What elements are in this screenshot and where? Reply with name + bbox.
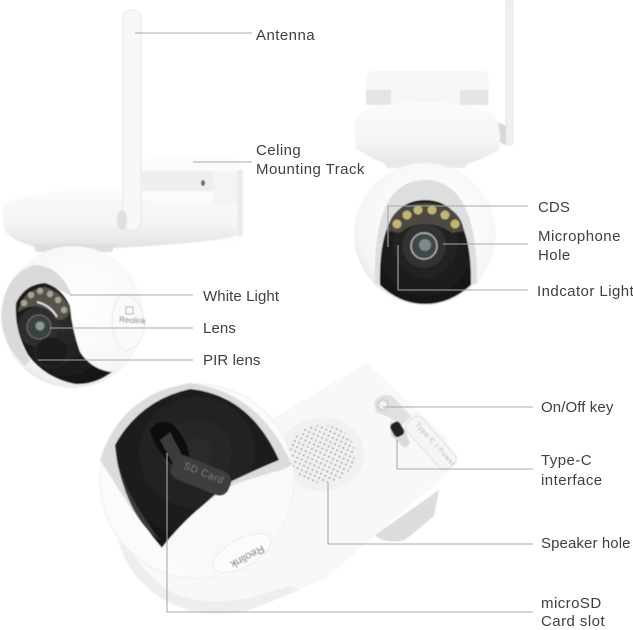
ball [354,163,496,305]
Reolink upside-down badge [207,526,277,580]
type-c cover tab: Type-C / Power [414,422,457,468]
base plate [117,363,455,614]
SD slot [150,422,190,465]
label: Celing Mounting Track: Mounting Track [256,161,365,178]
type-c cover tab [403,413,459,473]
dome base [3,190,237,248]
type-c port [389,420,406,439]
bracket underside [375,490,439,542]
white lower shell [160,467,293,576]
label: Microphone Hole: Hole [538,247,571,264]
label: Antenna: Antenna [256,27,315,44]
gray ring [1,265,72,366]
label: Celing Mounting Track: Celing [256,142,301,159]
speaker [280,417,364,491]
label: microSD Card slot: Card slot [541,613,605,630]
Reolink upside-down badge: Reolink [228,542,266,570]
side window [115,452,160,540]
gray ring [375,180,477,284]
label: microSD Card slot: microSD [541,595,602,612]
label: CDS: CDS [538,199,570,216]
Reolink badge [112,295,147,350]
label: Type-C interface: interface [541,472,603,489]
mount [366,71,489,105]
LED arc [388,203,464,233]
antenna [123,10,141,230]
mounting track [120,156,243,246]
SD Card cover tab: SD Card [182,461,225,487]
lens [18,307,58,347]
black face [16,283,112,384]
ball [2,246,144,388]
label: On/Off key: On/Off key [541,399,614,416]
PIR window [35,337,69,367]
Reolink badge: Reolink [119,315,147,326]
white light LEDs [18,287,70,320]
black face [380,200,471,304]
label: PIR lens: PIR lens [203,352,260,369]
black shell [115,389,279,548]
SD Card cover tab [167,452,234,499]
label: Indicator Light: Indcator Light [537,283,633,300]
label: Microphone Hole: Microphone [538,228,621,245]
right camera: front view [354,0,513,305]
neck [385,158,467,168]
port recess [374,395,411,426]
bottom camera: underside view [100,363,459,614]
label: Type-C interface: Type-C [541,452,592,469]
left camera: ceiling mount side view [1,10,243,388]
lens [402,224,446,268]
label: Speaker hole: Speaker hole [541,535,631,552]
dome [354,102,500,170]
on/off key [378,400,388,410]
label: Lens: Lens [203,320,236,337]
label: White Light: White Light [203,288,280,305]
leader lines [38,33,533,612]
antenna [506,0,513,146]
gray rim [100,383,292,550]
ball [100,384,294,578]
